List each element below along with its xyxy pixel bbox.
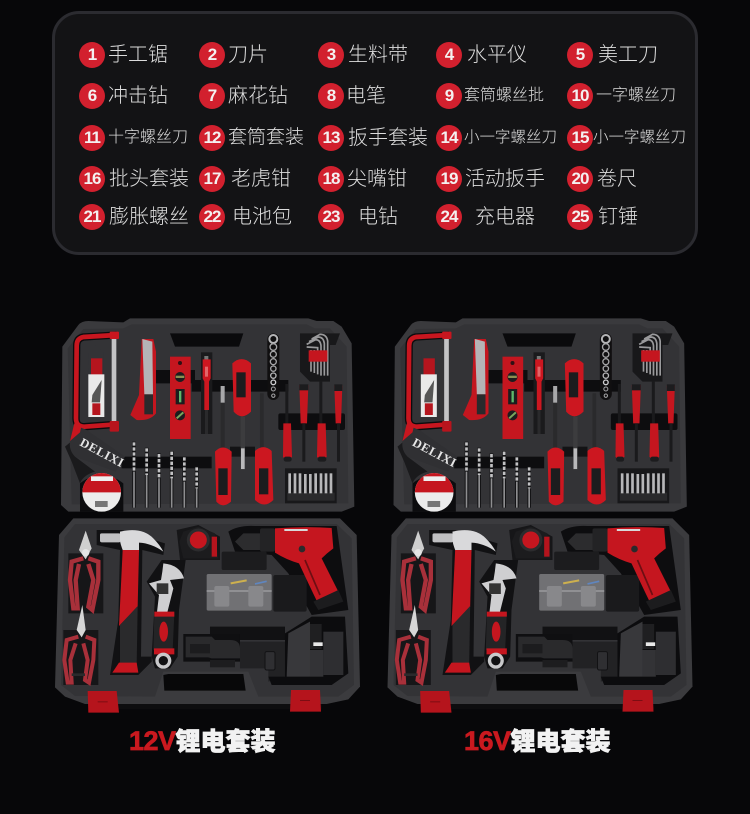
item 23: 23 — [323, 207, 339, 226]
icon: hand saw — [70, 332, 125, 472]
legend: numbered tool list — [79, 42, 686, 230]
item 1 — [79, 42, 168, 68]
item 16 — [79, 166, 189, 192]
item 19: 19 — [441, 169, 457, 188]
item 20: 卷尺 — [597, 168, 637, 190]
item 6: 6 — [88, 86, 96, 105]
icon: combination pliers 16V — [402, 531, 431, 610]
icon: cordless drill 16V — [567, 527, 676, 610]
item 12: 套筒套装 — [228, 127, 304, 148]
icon: small screwdrivers 16V — [615, 381, 675, 462]
item 3 — [318, 42, 408, 68]
item 7: 7 — [208, 86, 216, 105]
icon: test pen — [203, 356, 211, 434]
icon: drill bits — [134, 442, 197, 508]
icon: PTFE tape 16V — [415, 473, 453, 512]
icon: utility knife — [130, 339, 156, 420]
item 24 — [436, 204, 535, 230]
icon: wall plug box — [207, 574, 272, 611]
12V kit lower tray — [55, 518, 360, 713]
icon: socket set — [267, 333, 279, 400]
icon: hex keys 16V — [639, 334, 660, 376]
item 21: 21 — [84, 207, 100, 226]
panel: numbered parts legend — [52, 11, 698, 255]
item 19: 活动扳手 — [465, 168, 545, 190]
upper tray shell 16V — [393, 318, 687, 512]
icon: combination pliers — [70, 531, 98, 610]
icon: needle-nose pliers 16V — [397, 605, 427, 683]
icon: PTFE tape roll — [82, 473, 121, 512]
item 3: 生料带 — [348, 44, 408, 66]
icon: battery pack — [186, 637, 240, 667]
item 25 — [567, 204, 638, 230]
heading: 16V kit: 16V锂电套装 — [464, 726, 611, 756]
item 18 — [318, 166, 407, 192]
item 9: 9 — [445, 86, 453, 105]
item 8: 电笔 — [346, 85, 386, 107]
lower tray shell — [55, 518, 360, 709]
item 13: 13 — [323, 128, 339, 147]
item 25: 25 — [572, 207, 588, 226]
icon: tape measure — [179, 527, 218, 558]
icon: needle-nose pliers — [64, 605, 94, 683]
upper tray shell — [61, 318, 354, 512]
item 14: 小一字螺丝刀 — [464, 129, 557, 146]
item 7 — [199, 83, 288, 109]
item 8 — [318, 83, 386, 109]
icon: socket set 16V — [600, 333, 612, 400]
item 12 — [199, 125, 304, 151]
item 8: 8 — [327, 86, 335, 105]
icon: bit set — [287, 473, 335, 501]
item 4: 水平仪 — [467, 44, 527, 66]
item 17: 老虎钳 — [231, 168, 291, 190]
item 20 — [567, 166, 637, 192]
icon: wall plug box 16V — [539, 574, 604, 611]
icon: small screwdrivers — [283, 381, 342, 462]
item 10: 10 — [572, 86, 588, 105]
icon: red latches — [88, 690, 321, 713]
item 9: 套筒螺丝批 — [464, 87, 544, 104]
icon: utility knife 16V — [463, 339, 488, 420]
item 10 — [567, 83, 676, 109]
item 22: 电池包 — [232, 206, 292, 228]
item 12: 12 — [204, 128, 220, 147]
12V kit upper tray — [61, 318, 354, 512]
logo text 16V saw: DELIXI — [410, 435, 459, 470]
icon: charger — [287, 622, 343, 677]
item 1: 手工锯 — [108, 44, 168, 66]
icon: spirit level — [170, 357, 191, 439]
item 13 — [318, 125, 428, 151]
icon: blade pack 16V — [421, 346, 437, 417]
item 13: 扳手套装 — [348, 127, 428, 149]
item 5: 5 — [576, 45, 584, 64]
item 24: 充电器 — [475, 206, 535, 228]
icon: drill bits 16V — [466, 442, 529, 508]
item 25: 钉锤 — [598, 206, 638, 228]
item 22: 22 — [204, 207, 220, 226]
item 23: 电钻 — [358, 206, 398, 228]
item 14 — [436, 125, 557, 151]
icon: spirit level 16V — [502, 357, 523, 439]
item 11: 11 — [84, 128, 100, 147]
icon: hex key set — [307, 334, 328, 376]
item 24: 24 — [441, 207, 457, 226]
item 19 — [436, 166, 545, 192]
icon: screwdrivers large — [215, 359, 273, 505]
item 6: 冲击钻 — [108, 85, 168, 107]
item 17 — [199, 166, 291, 192]
item 5: 美工刀 — [598, 44, 658, 66]
item 2: 2 — [208, 45, 216, 64]
logo text 12V saw: DELIXI — [78, 435, 127, 470]
icon: bit set 16V — [620, 473, 667, 501]
16V kit upper tray — [393, 318, 687, 512]
icon: screwdrivers 16V — [547, 359, 606, 505]
item 14: 14 — [441, 128, 457, 147]
item 2: 刀片 — [228, 44, 268, 66]
item 2 — [199, 42, 268, 68]
item 15: 15 — [572, 128, 588, 147]
item 7: 麻花钻 — [228, 85, 288, 107]
item 9 — [436, 83, 544, 109]
16V kit lower tray — [388, 518, 692, 713]
icon: claw hammer 16V — [432, 530, 496, 673]
item 4: 4 — [445, 45, 453, 64]
lower tray shell 16V — [388, 518, 692, 709]
heading: 12V kit: 12V锂电套装 — [129, 726, 276, 756]
icon: cordless drill — [235, 527, 343, 610]
item 4 — [436, 42, 527, 68]
icon: battery pack 16V — [518, 637, 572, 667]
item 17: 17 — [204, 169, 220, 188]
icon: charger 16V — [619, 622, 676, 677]
icon: hand saw 16V — [402, 332, 457, 472]
item 15: 小一字螺丝刀 — [593, 129, 686, 146]
item 20: 20 — [572, 169, 588, 188]
item 21: 膨胀螺丝 — [109, 206, 189, 228]
item 11 — [79, 125, 188, 151]
item 15 — [567, 125, 686, 151]
item 23 — [318, 204, 398, 230]
icon: blade pack — [88, 346, 104, 417]
item 16: 16 — [84, 169, 100, 188]
item 5 — [567, 42, 658, 68]
item 10: 一字螺丝刀 — [596, 87, 676, 104]
icon: adjustable wrench — [149, 563, 184, 667]
item 11: 十字螺丝刀 — [108, 129, 188, 146]
item 3: 3 — [327, 45, 335, 64]
icon: tape measure 16V — [512, 527, 551, 558]
icon: adjustable wrench 16V — [481, 563, 516, 667]
item 6 — [79, 83, 168, 109]
item 1: 1 — [88, 45, 96, 64]
item 18: 尖嘴钳 — [347, 168, 407, 190]
icon: test pen 16V — [535, 356, 543, 434]
item 22 — [199, 204, 292, 230]
icon: claw hammer — [100, 530, 163, 673]
item 16: 批头套装 — [109, 168, 189, 190]
icon: red latches 16V — [420, 690, 653, 713]
item 18: 18 — [323, 169, 339, 188]
item 21 — [79, 204, 189, 230]
